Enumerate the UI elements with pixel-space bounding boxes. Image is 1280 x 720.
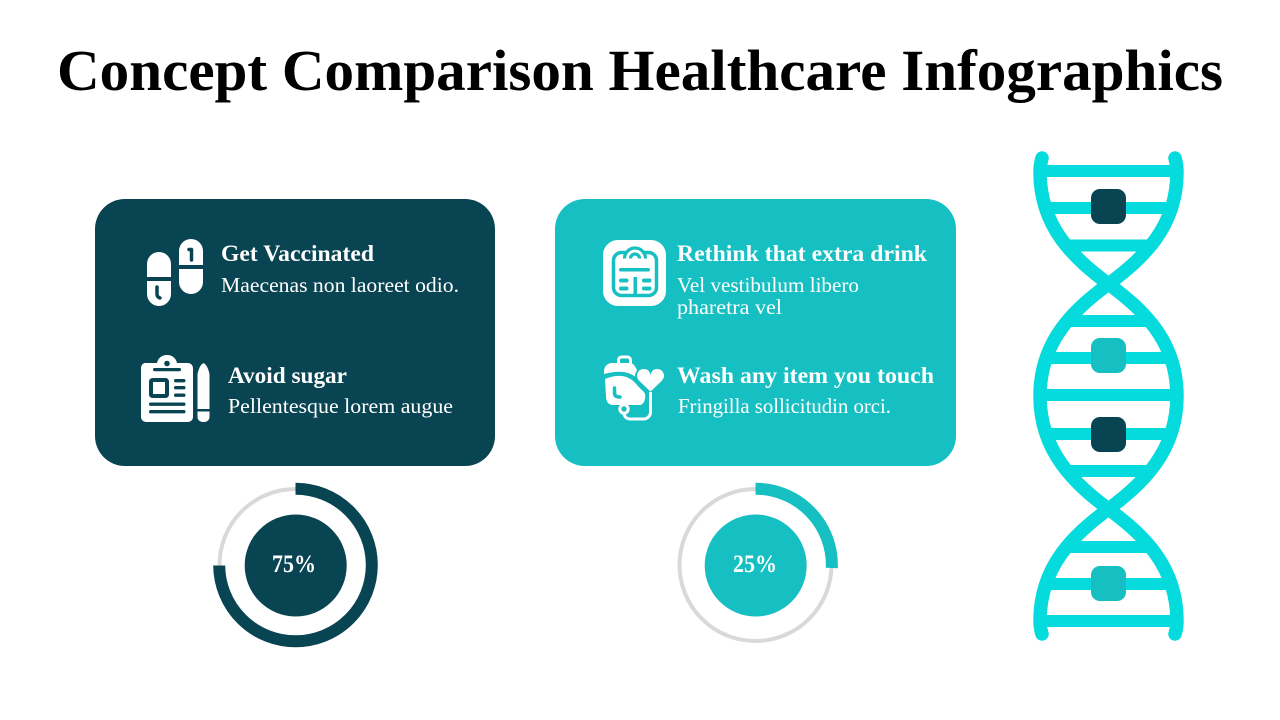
chart: 75% donut: 75%	[272, 551, 316, 578]
text: Get Vaccinated: Get Vaccinated	[221, 241, 374, 266]
panel: right teal card	[555, 199, 956, 466]
text: Rethink that extra drink: pharetra vel	[677, 295, 782, 319]
text: Rethink that extra drink: Rethink that extra drink	[677, 241, 927, 266]
icon: weighing scale	[603, 240, 666, 306]
text: Get Vaccinated	[221, 241, 459, 297]
text: Rethink that extra drink	[677, 241, 927, 319]
text: Avoid sugar: Avoid sugar	[228, 363, 347, 388]
chart: 25% donut: 25%	[733, 551, 777, 578]
chart: 75% donut	[219, 489, 372, 641]
text: Avoid sugar	[228, 363, 453, 418]
icon: stomach bag and heart	[604, 357, 665, 419]
text: Wash any item you touch	[677, 363, 934, 418]
panel: left dark card	[95, 199, 495, 466]
text: Get Vaccinated: Maecenas non laoreet odio.	[221, 273, 459, 297]
text: Wash any item you touch: Fringilla sollicitudin orci.	[678, 394, 891, 418]
illustration: DNA helix	[1040, 158, 1177, 634]
text: Wash any item you touch: Wash any item you touch	[677, 363, 934, 388]
text: Avoid sugar: Pellentesque lorem augue	[228, 394, 453, 418]
text: Rethink that extra drink: Vel vestibulum libero	[677, 273, 859, 297]
title: Concept Comparison Healthcare Infographics	[57, 38, 1223, 103]
icon: clipboard and pencil	[141, 355, 210, 422]
icon: pills	[147, 239, 203, 306]
chart: 25% donut	[680, 489, 832, 641]
